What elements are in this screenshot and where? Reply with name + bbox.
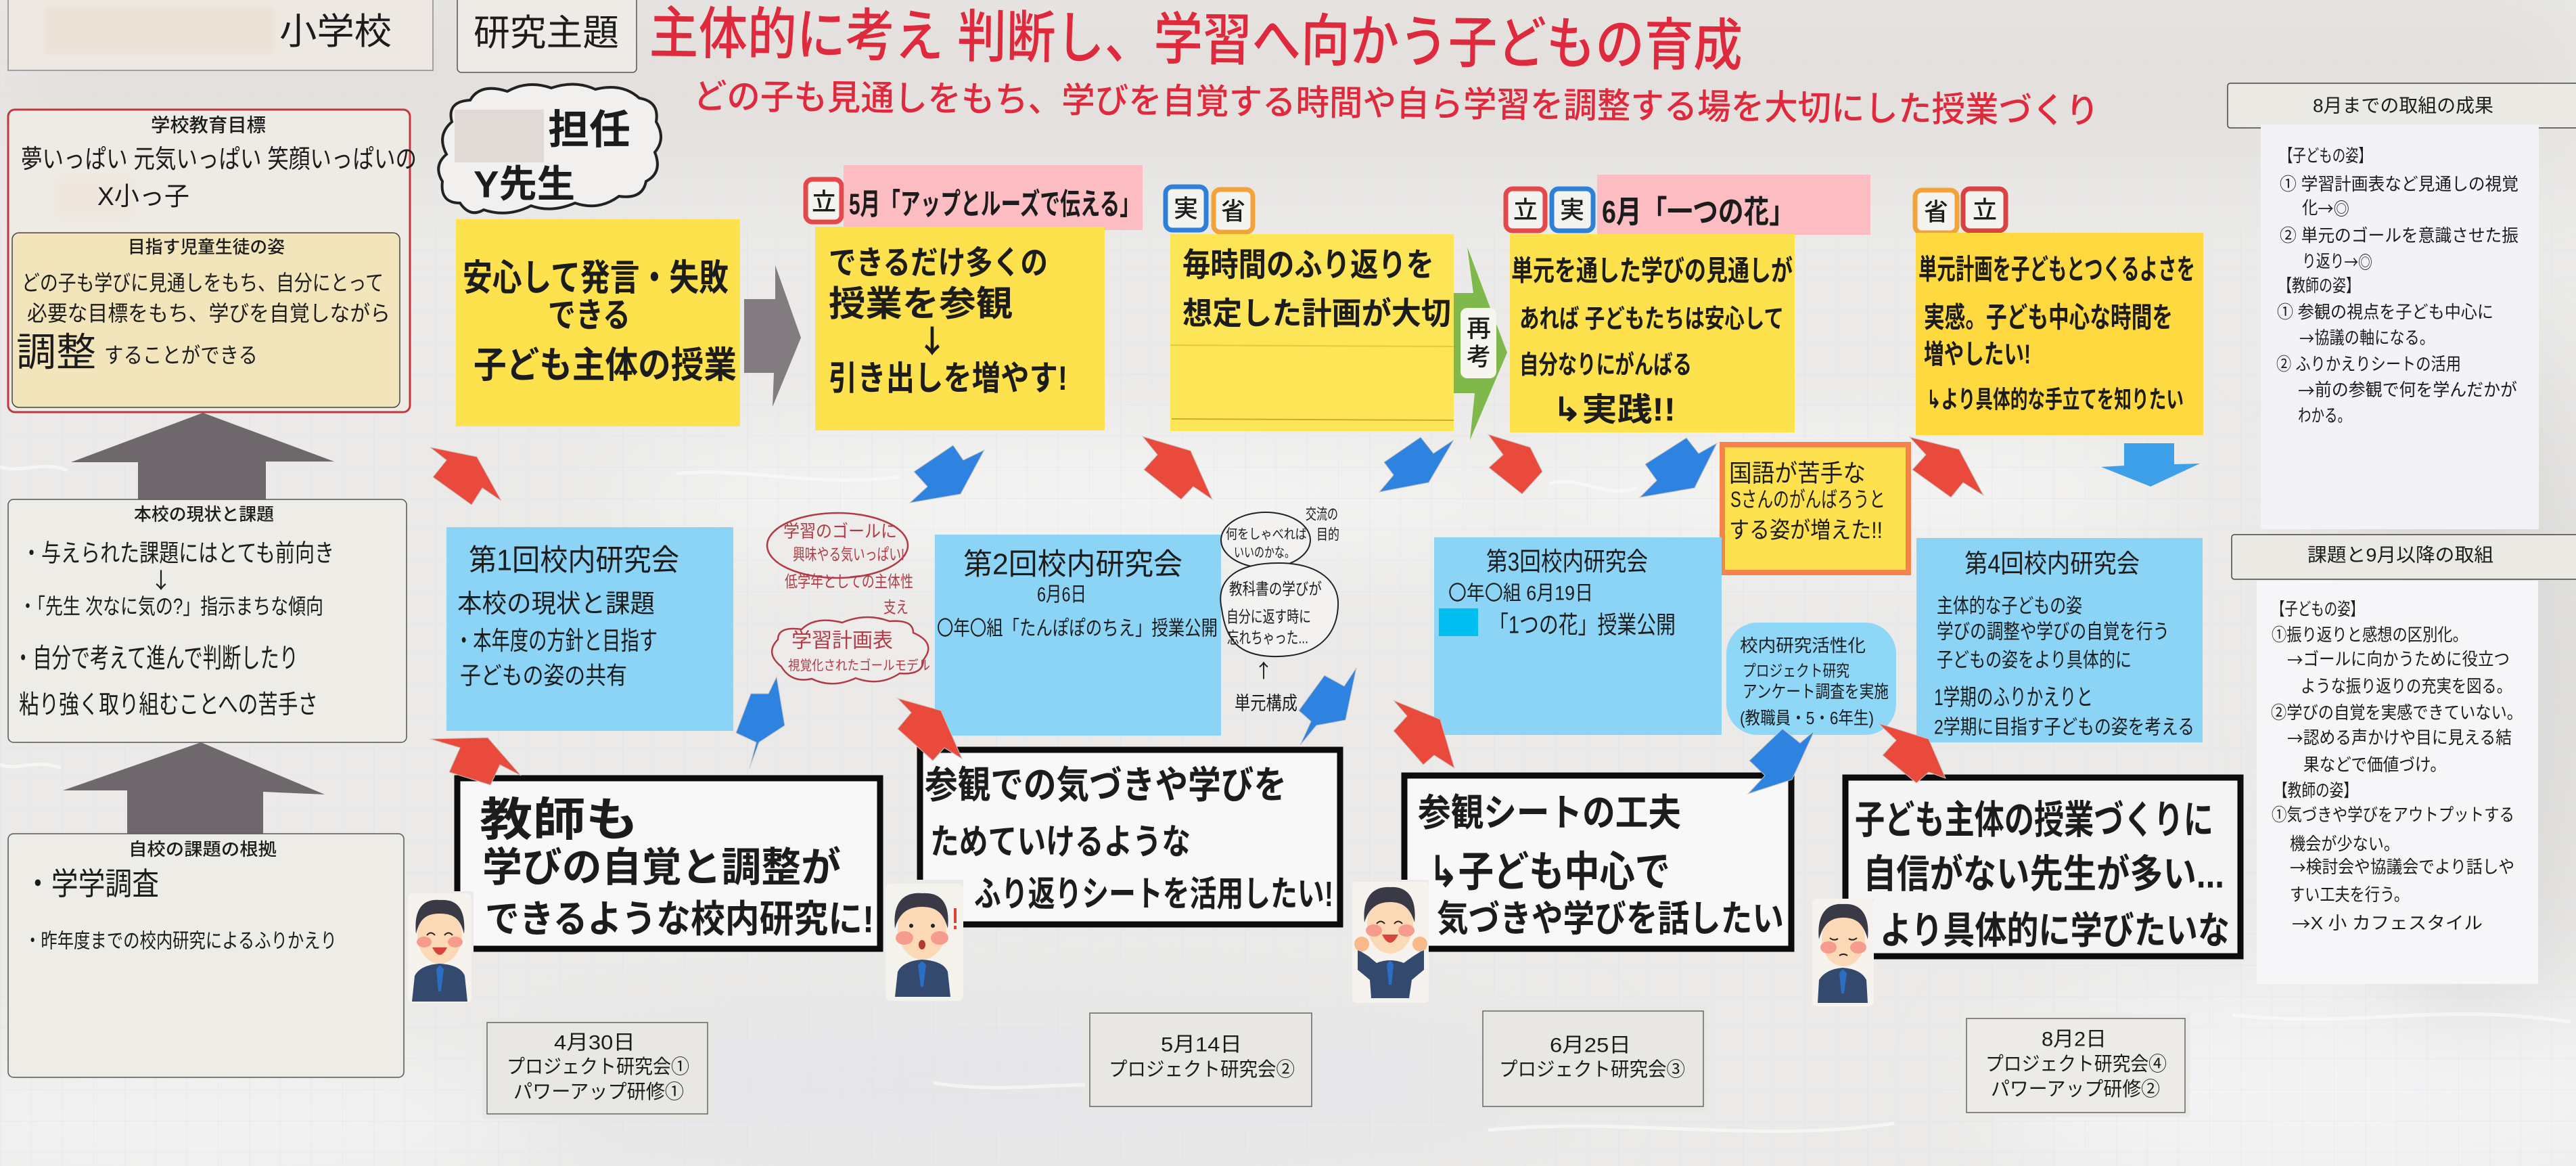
panel: fourth meeting [1916, 538, 2203, 742]
bubble: survey: アンケート調査を実施 [1743, 681, 1889, 702]
icon: teacher worried [1812, 899, 1874, 1006]
sheet: results to August: ① 学習計画表など見通しの視覚 [2280, 174, 2518, 194]
panel: ideal student [12, 233, 400, 407]
note: student S: する姿が増えた!! [1729, 518, 1883, 543]
date box: May 14 [1085, 1008, 1316, 1111]
panel: first meeting [446, 527, 733, 731]
sticky note: lesson 4: ↳実践!! [1552, 393, 1676, 428]
panel: current situation: ↓ [150, 564, 172, 595]
icon: teacher cheering [1352, 882, 1429, 1003]
title: 主体的に考え 判断し、学習へ向かう子どもの育成 [649, 1, 1743, 78]
sheet: issues from September: →認める声かけや目に見える結 [2287, 725, 2512, 750]
banner: results to August: 8月までの取組の成果 [2313, 95, 2493, 116]
sticky note: lesson 5: ↳より具体的な手立てを知りたい [1927, 386, 2184, 413]
frame: teacher thought 2 [920, 750, 1340, 924]
sheet: issues from September: ①振り返りと感想の区別化。 [2272, 625, 2468, 645]
panel: fourth meeting: 学びの調整や学びの自覚を行う [1937, 621, 2169, 643]
red arrow on frame 4 [1879, 723, 1946, 783]
banner: issues from September [2232, 535, 2576, 579]
arrow: red 1 [430, 447, 501, 505]
sticky note: lesson 3: 毎時間のふり返りを [1182, 248, 1434, 283]
sheet: issues from September: 果などで価値づけ。 [2303, 755, 2446, 775]
callout: red cloud learning plan: 学習計画表 [791, 629, 893, 652]
bubble: survey: (教職員・5・6年生) [1740, 708, 1874, 728]
frame: teacher thought 3 [1404, 776, 1791, 949]
panel: first meeting: 子どもの姿の共有 [460, 662, 627, 689]
panel: ideal student: することができる [104, 343, 258, 367]
banner: issues from September: 課題と9月以降の取組 [2307, 544, 2493, 566]
bubble: survey: 校内研究活性化 [1740, 635, 1866, 656]
arrow: up to goal [71, 413, 334, 499]
tag: reflect 1: 省 [1221, 198, 1245, 225]
callout: red ellipse goal interest [767, 513, 913, 617]
arrow: green rethink [1454, 247, 1507, 440]
frame: teacher thought 3: ↳子ども中心で [1429, 849, 1670, 896]
panel: evidence: ・昨年度までの校内研究によるふりかえり [24, 930, 337, 953]
sheet: results to August: ② ふりかえりシートの活用 [2276, 354, 2461, 374]
panel: evidence: ・学学調査 [24, 866, 159, 901]
panel: evidence [8, 834, 404, 1077]
sheet: issues from September: ①気づきや学びをアウトプットする [2272, 805, 2514, 825]
callout: teacher cloud [438, 84, 661, 213]
frame: teacher thought 2: ためていけるような [930, 823, 1191, 862]
date box: May 14: 5月14日 [1161, 1034, 1242, 1056]
sticky note: lesson 4: 自分なりにがんばる [1519, 351, 1692, 380]
sheet: issues from September: →検討会や協議会でより話しや [2290, 854, 2514, 880]
panel: fourth meeting: 2学期に目指す子どもの姿を考える [1934, 716, 2194, 739]
panel: third meeting: 「1つの花」授業公開 [1489, 610, 1676, 639]
sheet: results to August: ② 単元のゴールを意識させた振 [2280, 225, 2518, 246]
tag: plan 2: 立 [1513, 196, 1538, 223]
panel: current situation [8, 499, 407, 742]
sheet: results to August: ① 参観の視点を子ども中心に [2277, 302, 2493, 322]
date box: June 25: 6月25日 [1550, 1034, 1631, 1057]
arrow: blue down [2101, 443, 2200, 487]
date box: August 2 [1962, 1014, 2190, 1117]
date box: June 25 [1478, 1006, 1708, 1111]
sheet: issues from September [2257, 581, 2538, 984]
sheet: issues from September: ②学びの自覚を実感できていない。 [2271, 702, 2523, 723]
sheet: issues from September: すい工夫を行う。 [2290, 884, 2409, 905]
callout: red ellipse goal interest: 低学年としての主体性 [785, 573, 913, 591]
arrow: green rethink: 考 [1467, 342, 1491, 371]
frame: teacher thought 2: ふり返りシートを活用したい! [974, 875, 1333, 914]
callout: red ellipse goal interest: 学習のゴールに [783, 521, 897, 541]
label: June lesson [1597, 175, 1870, 235]
callout: speech bubble what to talk: 交流の [1306, 506, 1338, 522]
callout: speech bubble what to talk: 目的 [1316, 526, 1339, 543]
sheet: results to August: →協議の軸になる。 [2299, 325, 2435, 351]
panel: current situation: ・自分で考えて進んで判断したり [14, 644, 298, 673]
callout: speech bubble forgot [1220, 563, 1338, 656]
callout: teacher cloud: Y先生 [474, 162, 575, 206]
frame: teacher thought 1: 教師も [480, 794, 639, 846]
panel: school education goal [8, 110, 417, 412]
frame: teacher thought 4: 子ども主体の授業づくりに [1855, 799, 2213, 842]
text: goal statement: 夢いっぱい 元気いっぱい 笑顔いっぱいの [21, 145, 417, 174]
sticky note: lesson 5: 実感。子ども中心な時間を [1924, 302, 2173, 333]
callout: red cloud learning plan: 視覚化されたゴールモデル [788, 658, 930, 673]
sheet: results to August: 化→◎ [2302, 195, 2349, 221]
note: student S [1722, 445, 1908, 573]
sheet: issues from September: →ゴールに向かうために役立つ [2287, 647, 2510, 671]
red arrow on frame 1 [430, 738, 521, 785]
sticky note: lesson 4: 単元を通した学びの見通しが [1511, 254, 1793, 287]
panel: third meeting: 〇年〇組 6月19日 [1448, 582, 1593, 605]
panel: current situation: ・「先生 次なに気の?」指示まちな傾向 [19, 594, 323, 619]
date box: May 14: プロジェクト研究会② [1109, 1058, 1295, 1081]
date box: April 30: パワーアップ研修① [513, 1081, 684, 1103]
sheet: issues from September: 【子どもの姿】 [2272, 599, 2364, 619]
arrow: red 3 [1488, 434, 1542, 494]
frame: teacher thought 1 [457, 778, 880, 949]
panel: first meeting: 本校の現状と課題 [457, 590, 655, 619]
panel: current situation: 本校の現状と課題 [134, 504, 274, 524]
sheet: results to August: 【子どもの姿】 [2280, 145, 2372, 166]
sticky note: lesson 5 [1916, 233, 2203, 435]
panel: ideal student: 調整 [16, 330, 96, 375]
panel: second meeting: 第2回校内研究会 [963, 548, 1182, 581]
sticky note: lesson 1 [456, 219, 740, 426]
date box: April 30: 4月30日 [554, 1031, 635, 1054]
panel: evidence: 自校の課題の根拠 [129, 839, 277, 859]
sticky note: lesson 1: 子ども主体の授業 [474, 345, 737, 386]
sticky note: lesson 2: ↓ [917, 317, 948, 362]
panel: second meeting [935, 535, 1221, 736]
callout: speech bubble what to talk: 何をしゃべれば [1226, 526, 1307, 542]
tag: reflect 2 [1915, 190, 1957, 233]
bubble: survey: プロジェクト研究 [1743, 662, 1849, 681]
callout: speech bubble forgot: 自分に返す時に [1226, 608, 1311, 627]
panel: first meeting: ・本年度の方針と目指す [455, 627, 658, 656]
blue arrow from frame 2 [1299, 668, 1356, 745]
sheet: issues from September: →X 小 カフェスタイル [2292, 911, 2483, 935]
callout: speech bubble what to talk [1221, 506, 1339, 568]
frame: teacher thought 4: より具体的に学びたいな [1880, 910, 2230, 951]
sheet: results to August: り返り→◎ [2302, 249, 2372, 273]
arrow: grey right [744, 265, 801, 407]
label: May lesson: 5月「アップとルーズで伝える」 [849, 188, 1140, 221]
panel: current situation: ・与えられた課題にはとても前向き [22, 539, 334, 567]
banner: results to August [2228, 83, 2576, 128]
sticky note: lesson 2: 授業を参観 [829, 285, 1013, 324]
callout: red ellipse goal interest: 支え [883, 598, 908, 617]
sheet: results to August: 【教師の姿】 [2278, 275, 2360, 296]
research theme label: 研究主題 [474, 13, 619, 53]
panel: first meeting: 第1回校内研究会 [469, 544, 679, 577]
icon: teacher smiling [408, 893, 472, 1003]
research theme label [457, 0, 637, 72]
callout: speech bubble what to talk: いいのかな。 [1234, 545, 1295, 560]
sticky note: lesson 3 [1170, 234, 1454, 431]
panel: fourth meeting: 1学期のふりかえりと [1934, 685, 2093, 711]
tag: plan 2 [1506, 189, 1545, 231]
tag: plan 3 [1963, 189, 2006, 231]
panel: fourth meeting: 第4回校内研究会 [1964, 550, 2140, 579]
arrow: red 2 [1143, 436, 1212, 499]
tag: reflect 2: 省 [1924, 198, 1948, 226]
frame: teacher thought 4 [1845, 778, 2240, 956]
callout: speech bubble forgot: 忘れちゃった... [1227, 629, 1308, 647]
arrow: green rethink: 再 [1467, 314, 1491, 342]
sticky note: lesson 4 [1510, 234, 1795, 432]
subtitle: どの子も見通しをもち、学びを自覚する時間や自ら学習を調整する場を大切にした授業づくり [693, 77, 2099, 131]
sheet: issues from September: ような振り返りの充実を図る。 [2301, 676, 2512, 696]
sticky note: lesson 2: 引き出しを増やす! [829, 359, 1067, 397]
callout: red cloud learning plan [772, 617, 930, 683]
sticky note: lesson 1: 安心して発言・失敗 [463, 258, 729, 298]
annotation: unit structure [1235, 656, 1297, 713]
annotation: unit structure: ↑ [1254, 656, 1273, 683]
blue arrow from frame 1 [736, 677, 785, 768]
sheet: results to August: →前の参観で何を学んだかが [2298, 378, 2517, 402]
tag: plan 1: 立 [812, 188, 836, 215]
frame: teacher thought 2: 参観での気づきや学びを [925, 763, 1287, 807]
sheet: issues from September: 【教師の姿】 [2274, 780, 2358, 801]
panel: fourth meeting: 子どもの姿をより具体的に [1937, 650, 2132, 671]
date box: August 2: 8月2日 [2042, 1029, 2107, 1050]
sticky note: lesson 5: 増やしたい! [1924, 340, 2031, 369]
panel: third meeting: 第3回校内研究会 [1486, 548, 1648, 577]
panel: ideal student: どの子も学びに見通しをもち、自分にとって [22, 271, 384, 295]
sheet: results to August [2261, 125, 2539, 529]
note: student S: Sさんのがんばろうと [1730, 487, 1885, 512]
panel: third meeting [1434, 537, 1722, 735]
heading: school education goal: 学校教育目標 [151, 115, 266, 135]
school name label: 小学校 [279, 12, 392, 52]
callout: teacher cloud: 担任 [548, 107, 630, 153]
annotation: unit structure: 単元構成 [1235, 693, 1297, 713]
frame: teacher thought 1: 学びの自覚と調整が [482, 845, 841, 891]
frame: teacher thought 3: 参観シートの工夫 [1418, 792, 1681, 834]
blue arrow from frame 3 [1748, 729, 1814, 794]
label: June lesson: 6月「一つの花」 [1602, 194, 1795, 229]
school name label [8, 0, 433, 70]
tag: do 2: 実 [1560, 196, 1584, 223]
date box: June 25: プロジェクト研究会③ [1499, 1058, 1685, 1081]
label: May lesson [844, 165, 1143, 230]
frame: teacher thought 4: 自信がない先生が多い... [1863, 853, 2224, 896]
sheet: results to August: わかる。 [2298, 405, 2351, 426]
date box: August 2: プロジェクト研究会④ [1985, 1053, 2167, 1075]
panel: second meeting: 6月6日 [1037, 583, 1086, 606]
panel: current situation: 粘り強く取り組むことへの苦手さ [19, 691, 318, 719]
arrow: blue 2 [1379, 437, 1454, 492]
panel: ideal student: 必要な目標をもち、学びを自覚しながら [27, 301, 390, 326]
sticky note: lesson 4: あれば 子どもたちは安心して [1519, 305, 1784, 334]
arrow: up to current situation [63, 742, 325, 836]
sticky note: lesson 2: できるだけ多くの [829, 245, 1048, 282]
text: X school child: X小っ子 [97, 183, 189, 211]
tag: reflect 1 [1214, 189, 1253, 232]
frame: teacher thought 3: 気づきや学びを話したい [1437, 899, 1784, 939]
callout: red ellipse goal interest: 興味やる気いっぱい! [793, 545, 904, 564]
frame: teacher thought 1: できるような校内研究に! [485, 897, 874, 941]
tag: plan 3: 立 [1973, 196, 1997, 223]
arrow: blue 3 [1640, 438, 1717, 497]
panel: second meeting: 〇年〇組「たんぽぽのちえ」授業公開 [937, 617, 1218, 640]
icon: teacher surprised [886, 884, 963, 1001]
bubble: survey [1726, 623, 1896, 735]
date box: April 30 [482, 1018, 712, 1119]
tag: do 2 [1552, 189, 1593, 231]
red arrow on frame 2 [898, 698, 962, 761]
date box: August 2: パワーアップ研修② [1991, 1078, 2160, 1100]
arrow: red 4 [1910, 437, 1983, 497]
tag: do 1: 実 [1174, 195, 1198, 222]
red arrow on frame 3 [1394, 700, 1454, 768]
tag: plan 1 [806, 179, 842, 222]
sticky note: lesson 2 [815, 227, 1105, 430]
tag: do 1 [1166, 187, 1206, 230]
callout: speech bubble forgot: 教科書の学びが [1229, 581, 1322, 598]
panel: fourth meeting: 主体的な子どもの姿 [1937, 596, 2082, 617]
panel: ideal student: 目指す児童生徒の姿 [128, 237, 285, 257]
sheet: issues from September: 機会が少ない。 [2290, 834, 2399, 854]
date box: April 30: プロジェクト研究会① [507, 1056, 689, 1078]
arrow: blue 1 [910, 445, 984, 503]
note: student S: 国語が苦手な [1729, 459, 1866, 487]
sticky note: lesson 1: できる [548, 296, 630, 334]
sticky note: lesson 5: 単元計画を子どもとつくるよさを [1918, 253, 2195, 286]
sticky note: lesson 3: 想定した計画が大切 [1182, 296, 1451, 331]
